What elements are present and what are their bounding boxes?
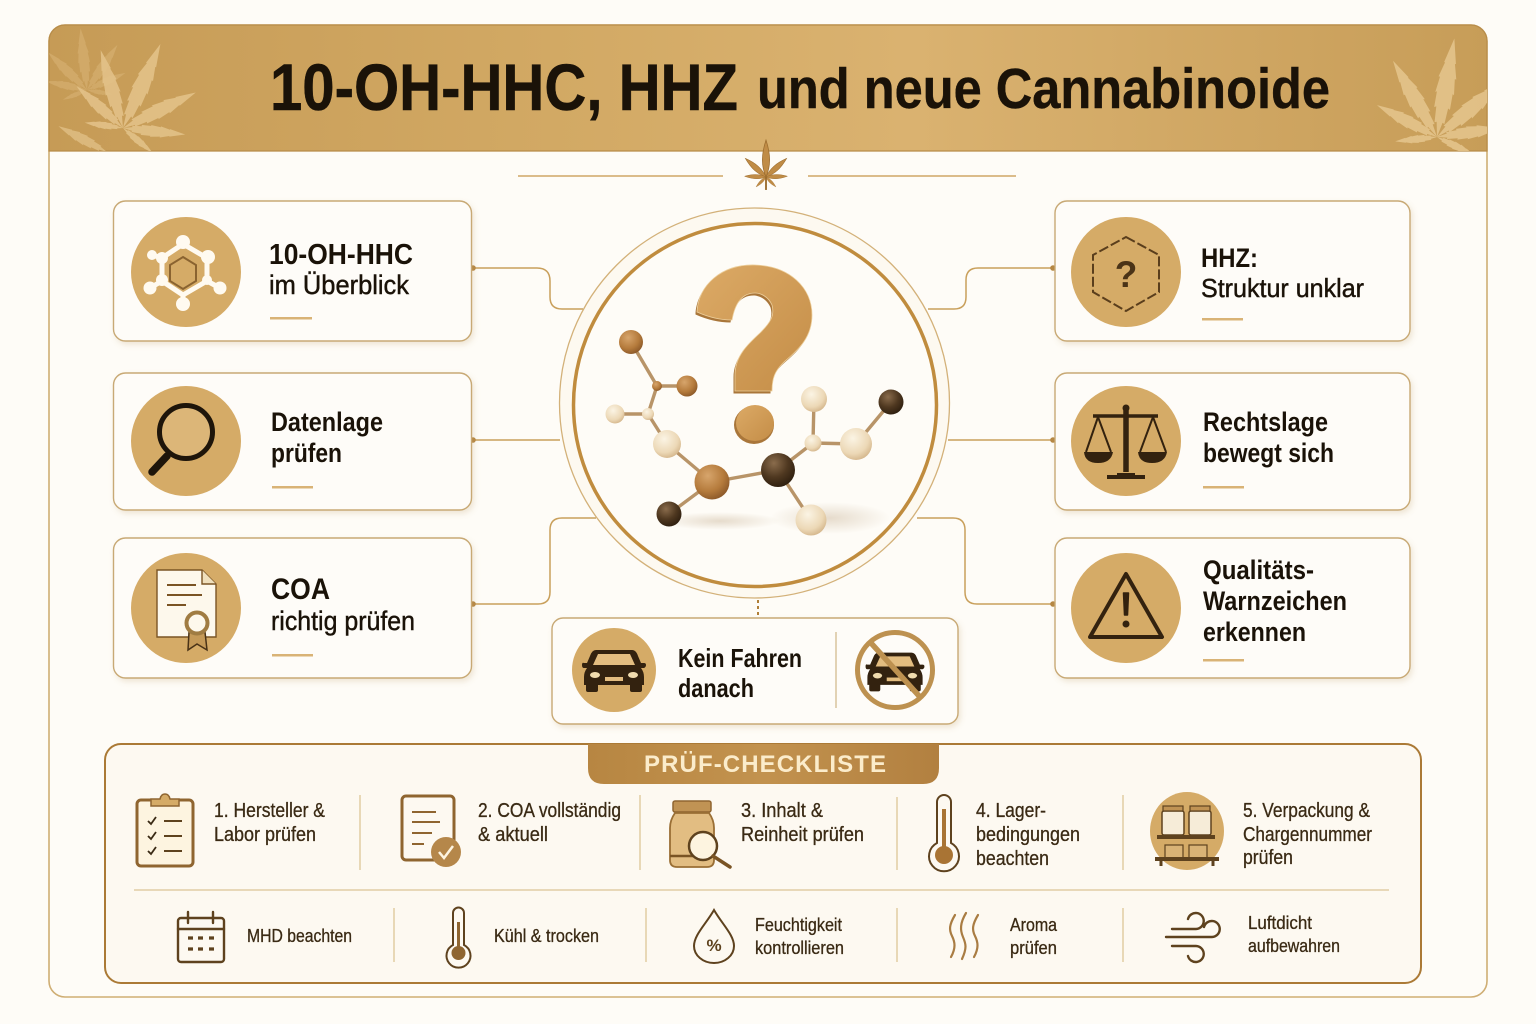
text: COA: [271, 573, 330, 606]
text: richtig prüfen: [271, 606, 415, 636]
icon: thermometer small: [447, 908, 471, 968]
step 2: 2. COA vollständig: [478, 800, 621, 822]
item: Aroma pruefen: Aroma: [1010, 915, 1058, 935]
step 3: 3. Inhalt &: [741, 800, 824, 822]
item: Feuchtigkeit kontrollieren: Feuchtigkeit: [755, 915, 842, 935]
text: [271, 407, 383, 488]
item: Kuehl und trocken: [447, 908, 599, 968]
title: 10-OH-HHC, HHZ: [270, 50, 738, 124]
item: Kuehl und trocken: Kühl & trocken: [494, 926, 599, 946]
question mark: [696, 265, 812, 444]
checklist heading tab: [588, 744, 939, 784]
panel: 10-OH-HHC: [114, 201, 472, 341]
step 4: bedingungen: [976, 824, 1080, 846]
decorative leaves: [39, 19, 1520, 166]
icon: clipboard: [137, 794, 193, 866]
text: [271, 573, 415, 656]
step 5: Chargennummer: [1243, 824, 1372, 846]
item: Luftdicht aufbewahren: [1166, 913, 1340, 962]
text: Warnzeichen: [1203, 586, 1347, 616]
text: [1201, 243, 1364, 320]
step 5: [1150, 792, 1372, 870]
text: Kein Fahren: [678, 643, 802, 673]
text: Qualitäts-: [1203, 555, 1314, 585]
text: erkennen: [1203, 617, 1306, 647]
icon: certificate: [157, 570, 216, 650]
step 1: 1. Hersteller &: [214, 800, 326, 822]
icon: scales: [1084, 404, 1167, 479]
panel: checklist: [105, 744, 1421, 983]
icon: aroma waves: [950, 913, 978, 959]
step 5: prüfen: [1243, 847, 1293, 869]
item: Luftdicht aufbewahren: aufbewahren: [1248, 936, 1340, 956]
icon: car: [582, 650, 646, 692]
floor shadows: [660, 502, 890, 534]
icon: hexagon question: [1093, 237, 1159, 311]
text: [1203, 407, 1334, 488]
text: HHZ:: [1201, 243, 1258, 273]
item: MHD beachten: MHD beachten: [247, 926, 352, 946]
central circle illustration: [560, 208, 950, 598]
icon: wind: [1166, 913, 1220, 962]
step 3: [670, 800, 864, 867]
icon: magnifier: [152, 406, 212, 472]
icon: calendar: [178, 912, 224, 962]
ornament divider under header: [518, 140, 1016, 190]
text: Datenlage: [271, 407, 383, 437]
step 2: [402, 796, 621, 867]
text: bewegt sich: [1203, 438, 1334, 468]
panel: Rechtslage: [1055, 373, 1410, 510]
header banner: [48, 24, 1488, 152]
step 3: Reinheit prüfen: [741, 824, 864, 846]
icon: jar with magnifier: [670, 801, 730, 867]
text: prüfen: [271, 438, 342, 468]
icon: molecule: [144, 235, 226, 311]
checklist heading tab: PRÜF-CHECKLISTE: [644, 751, 886, 778]
icon: jars on a shelf: [1150, 792, 1224, 870]
text: Rechtslage: [1203, 407, 1328, 437]
icon: document check: [402, 796, 461, 867]
molecule model: [606, 330, 904, 536]
icon: thermometer: [929, 795, 959, 871]
icon: warning triangle: [1090, 574, 1162, 637]
step 2: & aktuell: [478, 824, 548, 846]
text: [269, 239, 413, 320]
header banner: und neue Cannabinoide: [757, 57, 1330, 121]
step 1: Labor prüfen: [214, 824, 316, 846]
icon: humidity drop: %: [706, 936, 722, 955]
item: Aroma pruefen: [950, 913, 1058, 959]
step 4: [929, 795, 1080, 871]
step 4: beachten: [976, 848, 1049, 870]
item: MHD beachten: [178, 912, 352, 962]
item: Feuchtigkeit kontrollieren: [694, 910, 844, 963]
item: Aroma pruefen: prüfen: [1010, 938, 1057, 958]
panel: Qualitaets-Warnzeichen: [1055, 538, 1410, 678]
text: Struktur unklar: [1201, 273, 1364, 303]
text: danach: [678, 673, 754, 703]
panel: HHZ: [1055, 201, 1410, 341]
item: Feuchtigkeit kontrollieren: kontrollieren: [755, 938, 844, 958]
text: 10-OH-HHC: [269, 239, 413, 271]
icon: no driving: [858, 632, 932, 708]
panel: Datenlage: [114, 373, 472, 510]
step 4: 4. Lager-: [976, 800, 1046, 822]
text: im Überblick: [269, 270, 409, 300]
connector lines: [470, 265, 1056, 618]
step 1: [137, 794, 326, 866]
icon: hexagon question: ?: [1115, 254, 1137, 295]
icon: humidity drop: [694, 910, 734, 963]
dividers: [134, 795, 1389, 962]
text: [1203, 555, 1347, 662]
step 5: 5. Verpackung &: [1243, 800, 1371, 822]
panel: Kein Fahren danach: [552, 618, 958, 724]
panel: COA: [114, 538, 472, 678]
item: Luftdicht aufbewahren: Luftdicht: [1248, 913, 1312, 933]
text: [678, 643, 802, 703]
